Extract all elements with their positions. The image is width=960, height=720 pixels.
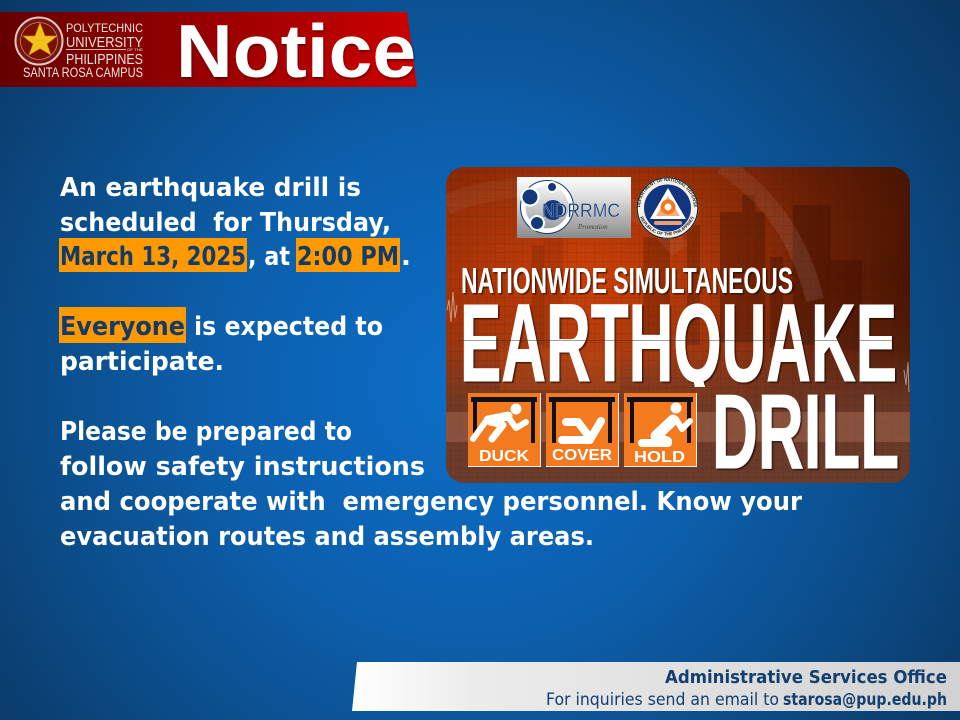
- logo: NDRRMC: Promotion: [577, 223, 608, 231]
- panel: earthquake drill poster: [446, 167, 910, 483]
- text block: safety instructions: [60, 417, 802, 552]
- university name: PHILIPPINES: [66, 51, 143, 68]
- logo: NDRRMC: [517, 177, 631, 238]
- text block: safety instructions: follow safety instructions: [60, 452, 425, 482]
- footer contact line: [546, 690, 947, 709]
- header banner: [0, 9, 417, 93]
- icon: hold: [624, 393, 697, 467]
- text block: drill announcement: scheduled for Thursday,: [60, 208, 391, 238]
- university name: SANTA ROSA CAMPUS: [23, 65, 143, 80]
- university name: [23, 23, 144, 80]
- heading: Notice: Notice: [176, 9, 416, 93]
- icon: hold: HOLD: [634, 449, 685, 466]
- icon: university seal: [16, 18, 62, 64]
- university name: POLYTECHNIC: [66, 23, 143, 35]
- university name: UNIVERSITY: [66, 34, 143, 51]
- seismograph traces: [447, 292, 909, 392]
- text block: safety instructions: and cooperate with emergency personnel. Know your: [60, 487, 802, 517]
- banner shape: [0, 12, 417, 87]
- highlight: date: [59, 238, 247, 272]
- text block: drill announcement: 2:00 PM: [297, 242, 399, 272]
- logo: civil defense seal: DEPARTMENT OF NATIONAL DEFENSE: [638, 178, 697, 208]
- highlight: everyone: [59, 307, 186, 343]
- text block: participation: [59, 307, 383, 377]
- text block: drill announcement: .: [401, 242, 411, 272]
- arc highlights: [446, 187, 680, 250]
- text block: participation: is expected to: [194, 312, 383, 342]
- text block: drill announcement: , at: [248, 242, 290, 272]
- text block: participation: participate.: [60, 347, 224, 377]
- logo: NDRRMC: NDRRMC: [542, 201, 620, 222]
- logo: civil defense seal: [636, 177, 698, 239]
- icon: duck: [468, 393, 541, 467]
- icon: cover: COVER: [552, 447, 612, 464]
- footer bar: [352, 662, 960, 711]
- text block: drill announcement: [59, 173, 411, 272]
- lower shading: [446, 167, 910, 483]
- highlight: time: [296, 238, 400, 272]
- text block: safety instructions: Please be prepared to: [60, 417, 352, 447]
- text block: drill announcement: March 13, 2025: [60, 242, 246, 272]
- footer contact line: For inquiries send an email to: [546, 690, 779, 709]
- university name: OF THE: [127, 48, 144, 52]
- text block: safety instructions: evacuation routes and assembly areas.: [60, 522, 594, 552]
- text block: participation: Everyone: [60, 312, 185, 342]
- text block: drill announcement: An earthquake drill is: [60, 173, 361, 203]
- icon: duck: DUCK: [479, 448, 529, 465]
- logo: civil defense seal: REPUBLIC OF THE PHILIPPINES: [640, 216, 694, 236]
- skyline: [532, 195, 862, 350]
- icon: cover: [546, 393, 619, 467]
